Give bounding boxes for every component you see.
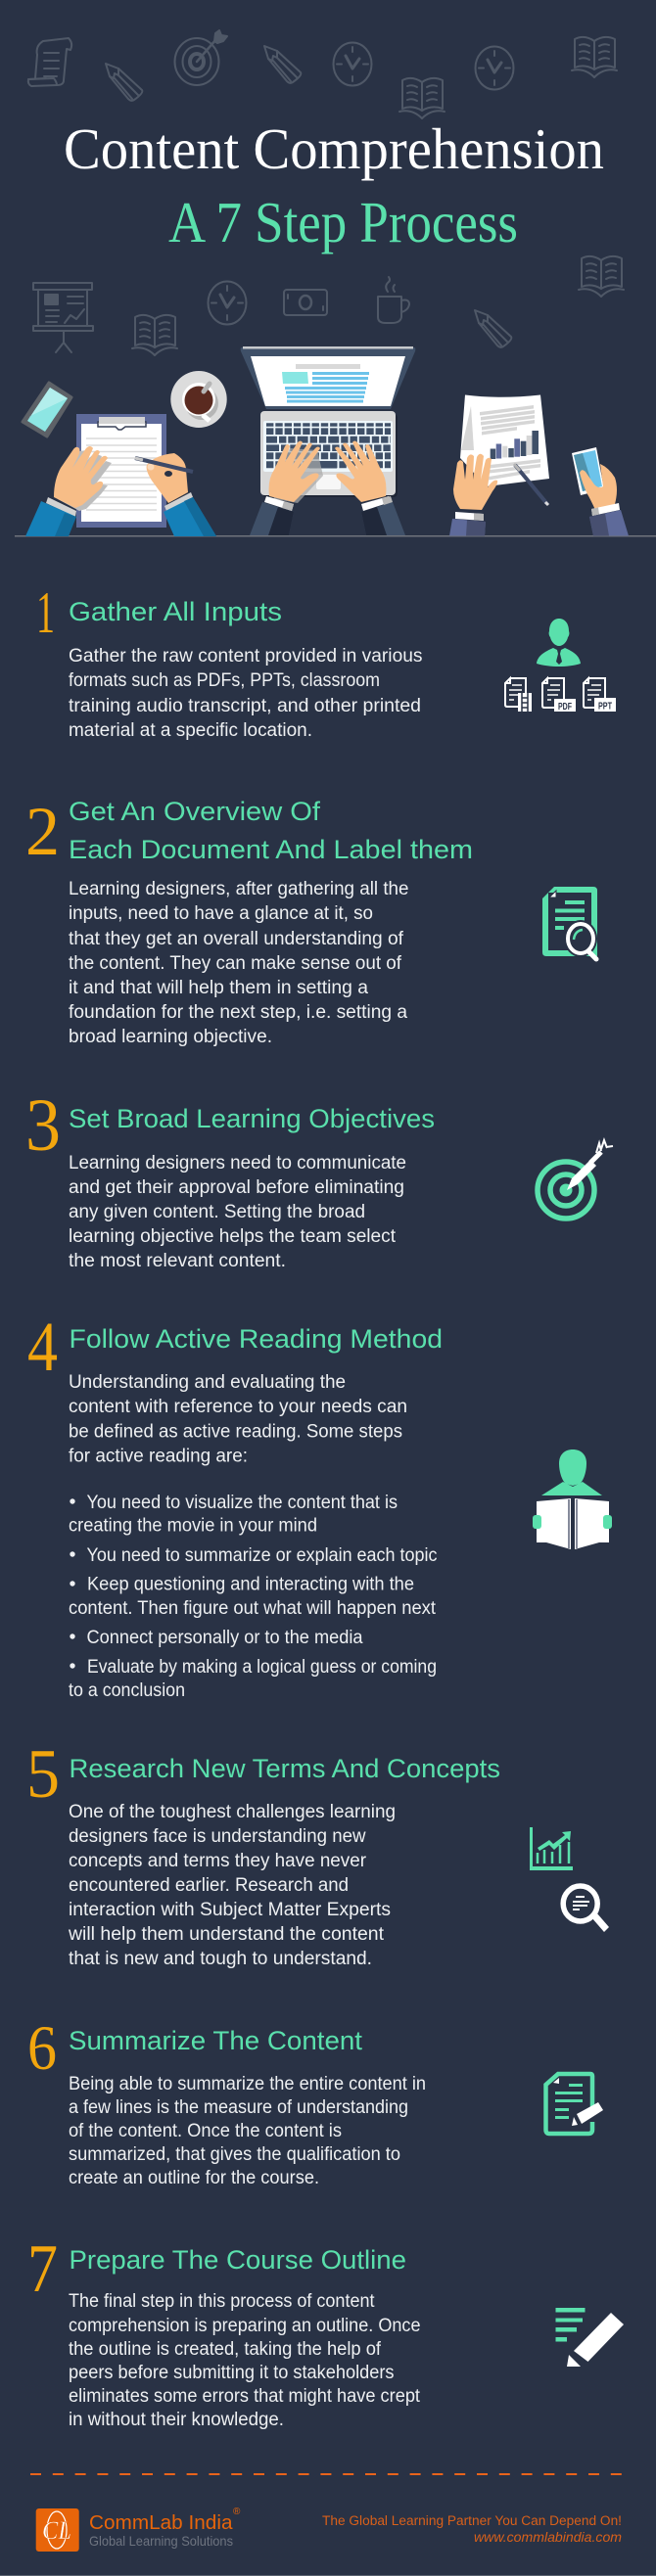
slogan: The Global Learning Partner You Can Depend On! (322, 2513, 622, 2528)
doodle: pencil (106, 64, 142, 101)
step 2 (25, 794, 597, 1047)
body text: learning objective helps the team select (69, 1226, 397, 1247)
body text: inputs, need to have a glance at it, so (69, 903, 373, 924)
title (64, 116, 604, 254)
heading: Follow Active Reading Method (69, 1324, 443, 1354)
report page with chart (460, 395, 549, 486)
icon: person reading book (533, 1449, 612, 1549)
icon: magnifier (563, 1886, 609, 1932)
step 6 (27, 2013, 603, 2188)
body text: of the content. Once the content is (69, 2121, 342, 2141)
body text: be defined as active reading. Some steps (69, 1421, 402, 1443)
body text: interaction with Subject Matter Experts (69, 1900, 391, 1920)
doodle: book (399, 78, 445, 118)
number 7: 7 (27, 2231, 58, 2307)
doodle: mug (378, 277, 409, 323)
body text: will help them understand the content (68, 1924, 385, 1945)
body text (69, 879, 409, 1047)
typing hand left (250, 440, 323, 535)
body text: training audio transcript, and other printed (69, 696, 421, 716)
bullet list (69, 1493, 437, 1701)
bullet list: to a conclusion (69, 1680, 185, 1701)
body text: designers face is understanding new (69, 1826, 366, 1847)
heading: Gather All Inputs (69, 597, 282, 626)
body text: for active reading are: (69, 1447, 248, 1466)
heading: Summarize The Content (69, 2026, 363, 2055)
doodle: money note (284, 290, 327, 315)
doodle: pencil (264, 46, 301, 83)
body text: peers before submitting it to stakeholders (69, 2363, 394, 2383)
icon: person with documents: PPT (598, 701, 612, 713)
body text: comprehension is preparing an outline. Once (69, 2316, 421, 2336)
title line 1: Content Comprehension (64, 116, 604, 181)
icon: document with pencil (546, 2074, 603, 2134)
body text: broad learning objective. (69, 1027, 272, 1047)
bullet list: Connect personally or to the media (86, 1628, 363, 1648)
logo (36, 2508, 79, 2552)
body text: eliminates some errors that might have crept (69, 2386, 421, 2407)
body text: in without their knowledge. (69, 2410, 284, 2430)
heading: Research New Terms And Concepts (69, 1754, 500, 1783)
hand on report (449, 454, 497, 536)
company tagline: Global Learning Solutions (89, 2533, 233, 2549)
doodle: clock (333, 43, 372, 86)
heading: Prepare The Course Outline (69, 2245, 406, 2275)
body text: any given content. Setting the broad (69, 1202, 365, 1222)
body text: content with reference to your needs can (69, 1397, 407, 1417)
registered mark: ® (233, 2507, 241, 2517)
body text: the most relevant content. (69, 1251, 286, 1271)
body text: concepts and terms they have never (69, 1851, 367, 1871)
icon: growth chart (530, 1827, 573, 1870)
logo: CL (42, 2516, 71, 2545)
doodle: clock (208, 282, 247, 325)
body text (69, 1153, 406, 1271)
body text: Learning designers need to communicate (69, 1153, 406, 1173)
bullet list: creating the movie in your mind (69, 1515, 317, 1537)
doodle: scroll (28, 38, 71, 86)
bullet list: You need to visualize the content that is (86, 1493, 398, 1513)
body text: foundation for the next step, i.e. setting a (69, 1002, 407, 1023)
tablet (23, 383, 71, 437)
doodle: book (572, 37, 617, 77)
doodle: presentation board (33, 283, 93, 352)
number 3: 3 (25, 1084, 61, 1167)
body text: a few lines is the measure of understanding (69, 2097, 408, 2118)
icon: document with magnifier (542, 887, 597, 959)
body text: encountered earlier. Research and (69, 1875, 349, 1896)
body text: create an outline for the course. (69, 2168, 319, 2188)
icon: person with documents (505, 619, 616, 713)
bullet list: Evaluate by making a logical guess or coming (87, 1657, 437, 1678)
body text: Being able to summarize the entire content in (69, 2074, 426, 2094)
body text (69, 1372, 407, 1466)
doodle: book (579, 256, 624, 297)
body text: that they get an overall understanding of (69, 929, 404, 949)
icon: outline list with pencil (556, 2308, 624, 2367)
body text: the content. They can make sense out of (69, 953, 402, 974)
body text: Gather the raw content provided in various (69, 646, 423, 667)
number 1: 1 (36, 580, 55, 645)
number 6: 6 (27, 2013, 57, 2084)
step 5 (26, 1736, 609, 1969)
footer (36, 2507, 622, 2552)
smartphone in hand (572, 447, 629, 536)
body text: material at a specific location. (69, 720, 312, 741)
body text (68, 1802, 396, 1969)
icon: target with arrow (538, 1140, 613, 1219)
clipboard (76, 414, 166, 528)
left hand writing on clipboard (25, 446, 112, 536)
body text: the outline is created, taking the help of (69, 2339, 382, 2360)
laptop screen (241, 346, 415, 409)
body text: Learning designers, after gathering all the (69, 879, 409, 899)
background doodles (28, 30, 624, 355)
doodle: clock (476, 47, 513, 90)
body text: Understanding and evaluating the (69, 1372, 346, 1393)
icon: person with documents: PDF (558, 702, 572, 713)
body text: The final step in this process of content (69, 2291, 375, 2312)
hero illustration (15, 346, 656, 536)
step 1 (36, 580, 616, 741)
number 4: 4 (27, 1308, 58, 1386)
heading: Each Document And Label them (69, 835, 473, 864)
body text: it and that will help them in setting a (69, 978, 368, 998)
body text: formats such as PDFs, PPTs, classroom (69, 670, 380, 691)
doodle: pencil (475, 310, 511, 347)
number 2: 2 (25, 794, 60, 870)
bullet list: Keep questioning and interacting with the (87, 1574, 414, 1595)
body text: and get their approval before eliminating (69, 1177, 404, 1198)
step 4 (27, 1308, 612, 1701)
doodle: target (174, 30, 227, 85)
body text: summarized, that gives the qualification to (69, 2144, 400, 2165)
pen (514, 464, 548, 505)
number 5: 5 (26, 1736, 60, 1813)
dashed divider (30, 2473, 623, 2475)
typing hand right (335, 440, 405, 535)
website: www.commlabindia.com (474, 2530, 622, 2545)
coffee cup (170, 371, 227, 428)
heading: Set Broad Learning Objectives (69, 1104, 435, 1133)
body text (69, 646, 423, 741)
body text: that is new and tough to understand. (69, 1949, 372, 1969)
company name: CommLab India (89, 2511, 233, 2534)
body text (69, 2074, 426, 2188)
body text: One of the toughest challenges learning (69, 1802, 396, 1822)
body text (69, 2291, 421, 2430)
bullet list: content. Then figure out what will happen next (69, 1598, 437, 1619)
laptop base and keyboard (260, 411, 398, 497)
step 3 (25, 1084, 613, 1271)
heading: Get An Overview Of (69, 797, 321, 826)
step 7 (27, 2231, 624, 2430)
right hand with pen (135, 453, 216, 536)
doodle: book (132, 315, 177, 355)
bullet list: You need to summarize or explain each topic (86, 1545, 437, 1566)
title line 2: A 7 Step Process (168, 190, 518, 254)
heading (69, 797, 473, 864)
desk line (15, 535, 656, 536)
